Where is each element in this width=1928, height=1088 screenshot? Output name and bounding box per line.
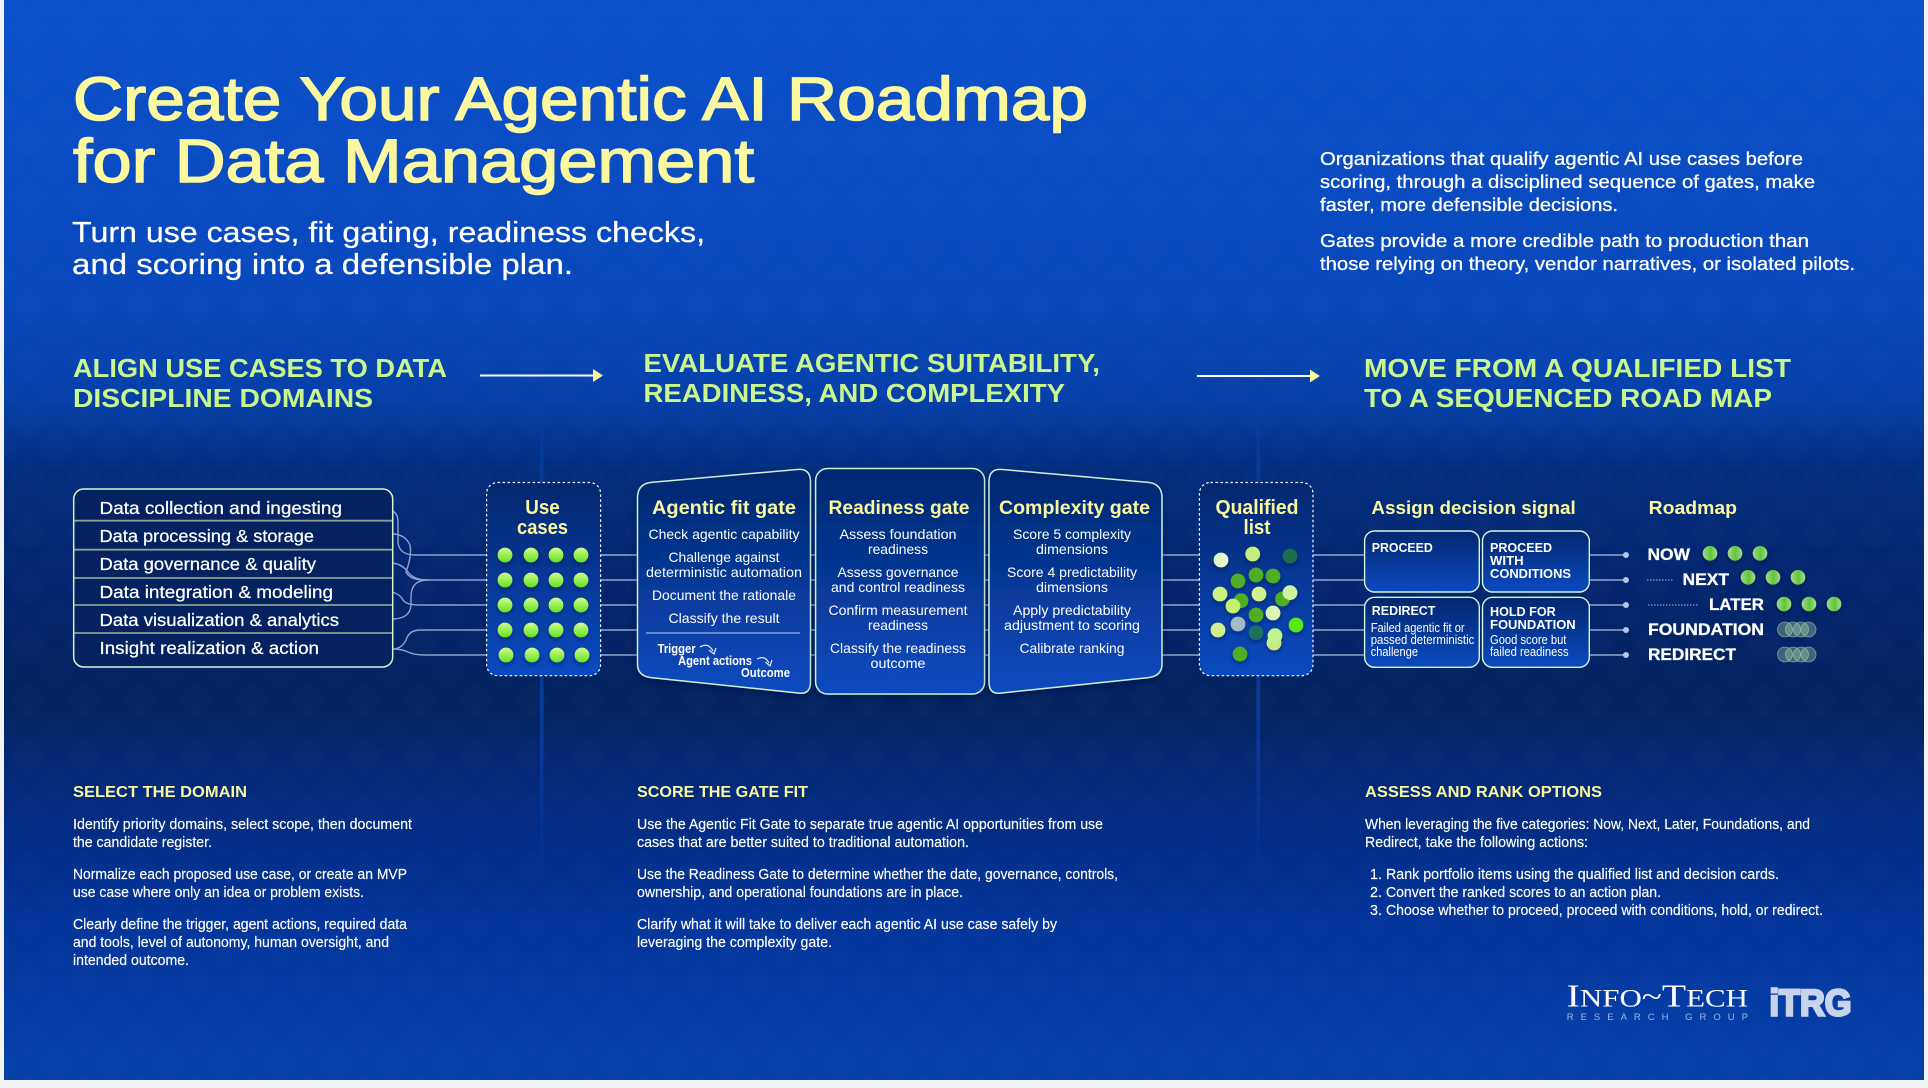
heading: move to road map: TO A SEQUENCED ROAD MAP (1364, 385, 1772, 413)
panel: readiness gate: Assess governance (838, 564, 959, 580)
connector lines (392, 511, 1629, 658)
card: hold for foundation (1482, 597, 1589, 667)
heading: align use cases (73, 355, 447, 413)
intro text block: Gates provide a more credible path to production than (1320, 230, 1809, 251)
arrow: to evaluate (480, 369, 603, 382)
panel: agentic fit gate: Trigger (658, 642, 696, 656)
panel: readiness gate: and control readiness (831, 579, 965, 595)
panel: complexity gate: dimensions (1036, 579, 1108, 595)
subtitle (72, 217, 705, 281)
panel: use cases: Use (525, 497, 560, 519)
card: proceed with conditions: PROCEED (1490, 540, 1552, 555)
text block: select the domain: Identify priority domains, select scope, then document (73, 817, 412, 833)
intro text block: those relying on theory, vendor narratives, or isolated pilots. (1320, 253, 1855, 274)
row: redirect (1648, 645, 1816, 664)
text block: select the domain: SELECT THE DOMAIN (73, 784, 247, 801)
card: proceed with conditions: CONDITIONS (1490, 566, 1571, 581)
panel: qualified list: list (1244, 517, 1271, 539)
panel: complexity gate: Complexity gate (999, 498, 1150, 519)
panel: readiness gate (816, 468, 985, 694)
arrow: to road map (1197, 370, 1320, 382)
panel: decision signal cards (1365, 531, 1589, 667)
text block: select the domain: and tools, level of autonomy, human oversight, and (73, 935, 389, 951)
text block: assess and rank options: Redirect, take the following actions: (1365, 835, 1588, 851)
panel: data discipline domains: Data processing & storage (100, 526, 314, 546)
panel: complexity gate: Score 5 complexity (1013, 526, 1131, 542)
logo: Info-Tech Research Group: INFO ~TECH (1567, 978, 1748, 1014)
card: hold for foundation: HOLD FOR (1490, 604, 1556, 619)
text block: select the domain: Clearly define the trigger, agent actions, required data (73, 917, 407, 933)
text block: score the gate fit: leveraging the complexity gate. (637, 935, 832, 951)
text block: score the gate fit: cases that are better suited to traditional automation. (637, 835, 969, 851)
card: redirect (1365, 597, 1479, 667)
heading: evaluate gates: READINESS, AND COMPLEXITY (644, 380, 1065, 408)
panel: complexity gate: Calibrate ranking (1020, 640, 1124, 656)
panel: qualified list (1199, 482, 1313, 676)
row: later: LATER (1709, 595, 1764, 614)
panel: complexity gate: Apply predictability (1013, 602, 1131, 618)
text block: select the domain: Normalize each proposed use case, or create an MVP (73, 867, 407, 883)
row: next (1647, 570, 1805, 589)
card: redirect: REDIRECT (1372, 603, 1435, 618)
text block: select the domain: the candidate register. (73, 835, 212, 851)
subtitle: Turn use cases, fit gating, readiness checks, (72, 217, 705, 249)
text block: score the gate fit: SCORE THE GATE FIT (637, 784, 809, 801)
card: redirect: Failed agentic fit or (1371, 621, 1465, 635)
card: proceed with conditions: WITH (1490, 553, 1524, 568)
text block: score the gate fit: Use the Agentic Fit Gate to separate true agentic AI opportunities from use (637, 817, 1103, 833)
heading: align use cases: DISCIPLINE DOMAINS (73, 385, 373, 413)
row: redirect: REDIRECT (1648, 645, 1737, 664)
row: now: NOW (1648, 545, 1691, 564)
text block: assess and rank options: Choose whether to proceed, proceed with conditions, hold, or redirect. (1386, 903, 1823, 919)
card: hold for foundation: Good score but (1490, 633, 1567, 647)
panel: use cases: cases (517, 517, 568, 539)
text block: select the domain: use case where only an idea or problem exists. (73, 885, 364, 901)
title (73, 65, 1088, 195)
panel: agentic fit gate: Outcome (741, 666, 790, 680)
panel: data discipline domains: Data governance & quality (100, 554, 316, 574)
panel: readiness gate: Assess foundation (840, 526, 956, 542)
intro text block: faster, more defensible decisions. (1320, 194, 1618, 215)
panel: complexity gate: dimensions (1036, 541, 1108, 557)
text block: select the domain (73, 784, 412, 969)
title: for Data Management (73, 127, 754, 195)
panel: qualified list: Qualified (1216, 497, 1298, 519)
row: later (1648, 595, 1841, 614)
text block: assess and rank options: When leveraging the five categories: Now, Next, Later, Foundations, and (1365, 817, 1810, 833)
text block: assess and rank options: 3. (1370, 903, 1382, 919)
heading: evaluate gates: EVALUATE AGENTIC SUITABILITY, (644, 350, 1100, 378)
logo: ITRG: iTRG (1770, 982, 1852, 1024)
row: next: NEXT (1682, 570, 1730, 589)
subtitle: and scoring into a defensible plan. (72, 249, 573, 281)
card: redirect: passed deterministic (1371, 633, 1474, 647)
text block: assess and rank options: 2. (1370, 885, 1382, 901)
text block: score the gate fit: ownership, and operational foundations are in place. (637, 885, 963, 901)
panel: use cases (487, 482, 601, 676)
intro text block (1320, 148, 1855, 274)
text block: assess and rank options: 1. (1370, 867, 1382, 883)
panel: readiness gate: Confirm measurement (828, 602, 968, 618)
card: proceed with conditions (1482, 531, 1589, 592)
panel: agentic fit gate: Challenge against (668, 549, 780, 565)
text block: assess and rank options (1365, 784, 1823, 919)
card: redirect: challenge (1371, 645, 1418, 659)
row: foundation (1648, 620, 1816, 639)
panel: agentic fit gate: Classify the result (668, 610, 780, 626)
panel: agentic fit gate: deterministic automation (646, 564, 802, 580)
heading: move to road map: MOVE FROM A QUALIFIED LIST (1364, 355, 1791, 383)
card: hold for foundation: failed readiness (1490, 645, 1569, 659)
panel: data discipline domains: Data integration & modeling (100, 582, 333, 602)
card: hold for foundation: FOUNDATION (1490, 617, 1576, 632)
heading: align use cases: ALIGN USE CASES TO DATA (73, 355, 447, 383)
panel: readiness gate: Classify the readiness (830, 640, 966, 656)
row: foundation: FOUNDATION (1648, 620, 1764, 639)
text block: assess and rank options: ASSESS AND RANK OPTIONS (1365, 784, 1602, 801)
panel: data discipline domains: Data collection and ingesting (100, 498, 342, 518)
logo: Info-Tech Research Group: RESEARCH GROUP (1567, 1012, 1748, 1023)
text block: assess and rank options: Rank portfolio items using the qualified list and decision cards. (1386, 867, 1779, 883)
panel: readiness gate: readiness (868, 617, 928, 633)
heading: evaluate gates (644, 350, 1100, 408)
card: proceed (1365, 531, 1479, 592)
panel: complexity gate (989, 469, 1162, 693)
panel: agentic fit gate (638, 469, 810, 693)
text block: score the gate fit: Clarify what it will take to deliver each agentic AI use case safely by (637, 917, 1058, 933)
panel: roadmap: Roadmap (1649, 497, 1737, 518)
text block: score the gate fit: Use the Readiness Gate to determine whether the date, governance, controls, (637, 867, 1118, 883)
panel: readiness gate: readiness (868, 541, 928, 557)
panel: complexity gate: adjustment to scoring (1004, 617, 1140, 633)
heading: assign decision signal: Assign decision signal (1371, 497, 1576, 518)
text block: assess and rank options: Convert the ranked scores to an action plan. (1386, 885, 1661, 901)
panel: agentic fit gate: Agent actions (678, 654, 752, 668)
row: now (1648, 545, 1767, 564)
heading: move to road map (1364, 355, 1791, 413)
panel: data discipline domains: Data visualization & analytics (100, 610, 339, 630)
text block: select the domain: intended outcome. (73, 953, 189, 969)
intro text block: Organizations that qualify agentic AI use cases before (1320, 148, 1803, 169)
panel: readiness gate: outcome (870, 655, 926, 671)
panel: data discipline domains: Insight realization & action (100, 638, 319, 658)
title: Create Your Agentic AI Roadmap (73, 65, 1088, 133)
panel: agentic fit gate: Agentic fit gate (652, 498, 796, 519)
panel: agentic fit gate: Document the rationale (652, 587, 796, 603)
card: proceed: PROCEED (1372, 540, 1433, 555)
panel: data discipline domains (74, 489, 393, 667)
panel: readiness gate: Readiness gate (828, 498, 970, 519)
panel: agentic fit gate: Check agentic capability (648, 526, 800, 542)
intro text block: scoring, through a disciplined sequence of gates, make (1320, 171, 1815, 192)
panel: complexity gate: Score 4 predictability (1007, 564, 1137, 580)
text block: score the gate fit (637, 784, 1118, 951)
panel: roadmap (1647, 497, 1841, 664)
